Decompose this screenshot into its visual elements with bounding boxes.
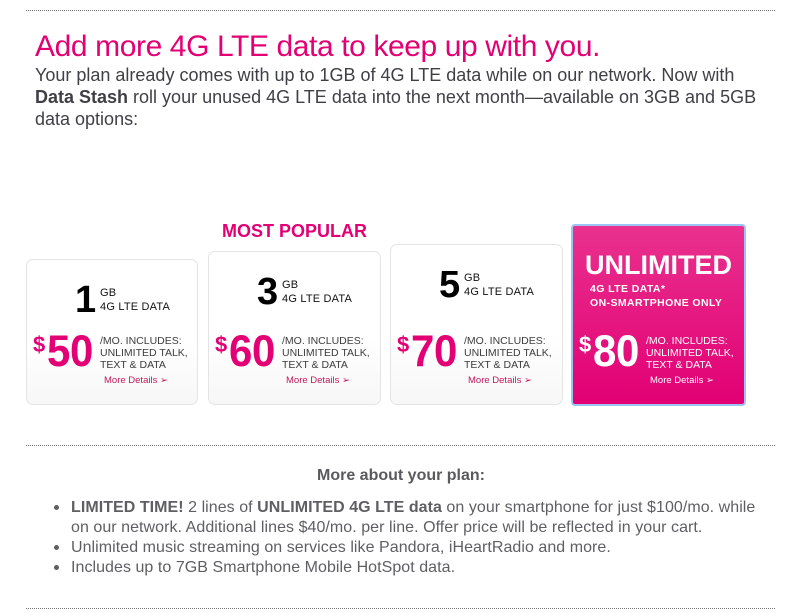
plan card: 1 GB: 50	[47, 325, 93, 376]
plan card: 1 GB: $	[33, 332, 45, 357]
plan card: unlimited: UNLIMITED TALK,	[646, 347, 734, 359]
plan card: 5 GB: More Details ➢	[468, 375, 532, 386]
plan card: unlimited: 4G LTE DATA*	[590, 283, 665, 295]
intro text: data options:	[35, 109, 138, 129]
plan card: 1 GB: 1	[75, 279, 96, 321]
plan card: 5 GB	[390, 244, 563, 405]
plan card: 3 GB: GB	[282, 279, 298, 291]
plan card: 3 GB: TEXT & DATA	[282, 359, 348, 371]
intro text	[35, 65, 756, 129]
plan card: 1 GB: /MO. INCLUDES:	[100, 335, 182, 347]
plan card: unlimited: ON-SMARTPHONE ONLY	[590, 297, 722, 309]
plan card: 5 GB: 5	[439, 264, 460, 306]
bullet list: on our network. Additional lines $40/mo. per line. Offer price will be reflected in your cart.	[71, 519, 702, 536]
plan card: 3 GB: $	[215, 332, 227, 357]
bullet list	[54, 499, 755, 576]
plan card: unlimited: More Details ➢	[650, 375, 714, 386]
plan card: 3 GB: More Details ➢	[286, 375, 350, 386]
most popular label: MOST POPULAR	[222, 221, 367, 241]
plan card: 5 GB: UNLIMITED TALK,	[464, 347, 552, 359]
section heading: more about your plan: More about your plan:	[317, 467, 485, 484]
bullet list: Unlimited music streaming on services like Pandora, iHeartRadio and more.	[71, 539, 611, 556]
plan card: 1 GB: 4G LTE DATA	[100, 301, 170, 313]
plan card: 5 GB: 4G LTE DATA	[464, 286, 534, 298]
plan card: 5 GB: GB	[464, 272, 480, 284]
plan card: 3 GB: UNLIMITED TALK,	[282, 347, 370, 359]
plan card: unlimited: TEXT & DATA	[646, 359, 712, 371]
plan card: 1 GB: UNLIMITED TALK,	[100, 347, 188, 359]
plan card: 5 GB: TEXT & DATA	[464, 359, 530, 371]
bullet list: LIMITED TIME! 2 lines of UNLIMITED 4G LTE data on your smartphone for just $100/mo. while	[71, 499, 755, 516]
plan card: 5 GB: 70	[411, 325, 457, 376]
bullet list: Includes up to 7GB Smartphone Mobile HotSpot data.	[71, 559, 455, 576]
plan card: unlimited: UNLIMITED	[585, 250, 732, 280]
plan card: 3 GB: 4G LTE DATA	[282, 293, 352, 305]
plan card: 3 GB: 60	[229, 325, 275, 376]
plan card: 3 GB	[208, 251, 381, 405]
plan card: unlimited: $	[579, 332, 591, 357]
intro text: Data Stash roll your unused 4G LTE data into the next month—available on 3GB and 5GB	[35, 87, 756, 107]
plan card: 5 GB: /MO. INCLUDES:	[464, 335, 546, 347]
plan card: 5 GB: $	[397, 332, 409, 357]
plan card: unlimited: 80	[593, 325, 639, 376]
plan card: 3 GB: /MO. INCLUDES:	[282, 335, 364, 347]
plan card: 1 GB: More Details ➢	[104, 375, 168, 386]
plan card: 1 GB	[26, 259, 198, 405]
plan card: unlimited: /MO. INCLUDES:	[646, 335, 728, 347]
title: Add more 4G LTE data to keep up with you.	[35, 30, 600, 63]
intro text: Your plan already comes with up to 1GB of 4G LTE data while on our network. Now with	[35, 65, 734, 85]
plan card: 1 GB: TEXT & DATA	[100, 359, 166, 371]
plan card: 3 GB: 3	[257, 271, 278, 313]
plan card: 1 GB: GB	[100, 287, 116, 299]
plan card: unlimited	[571, 224, 746, 406]
